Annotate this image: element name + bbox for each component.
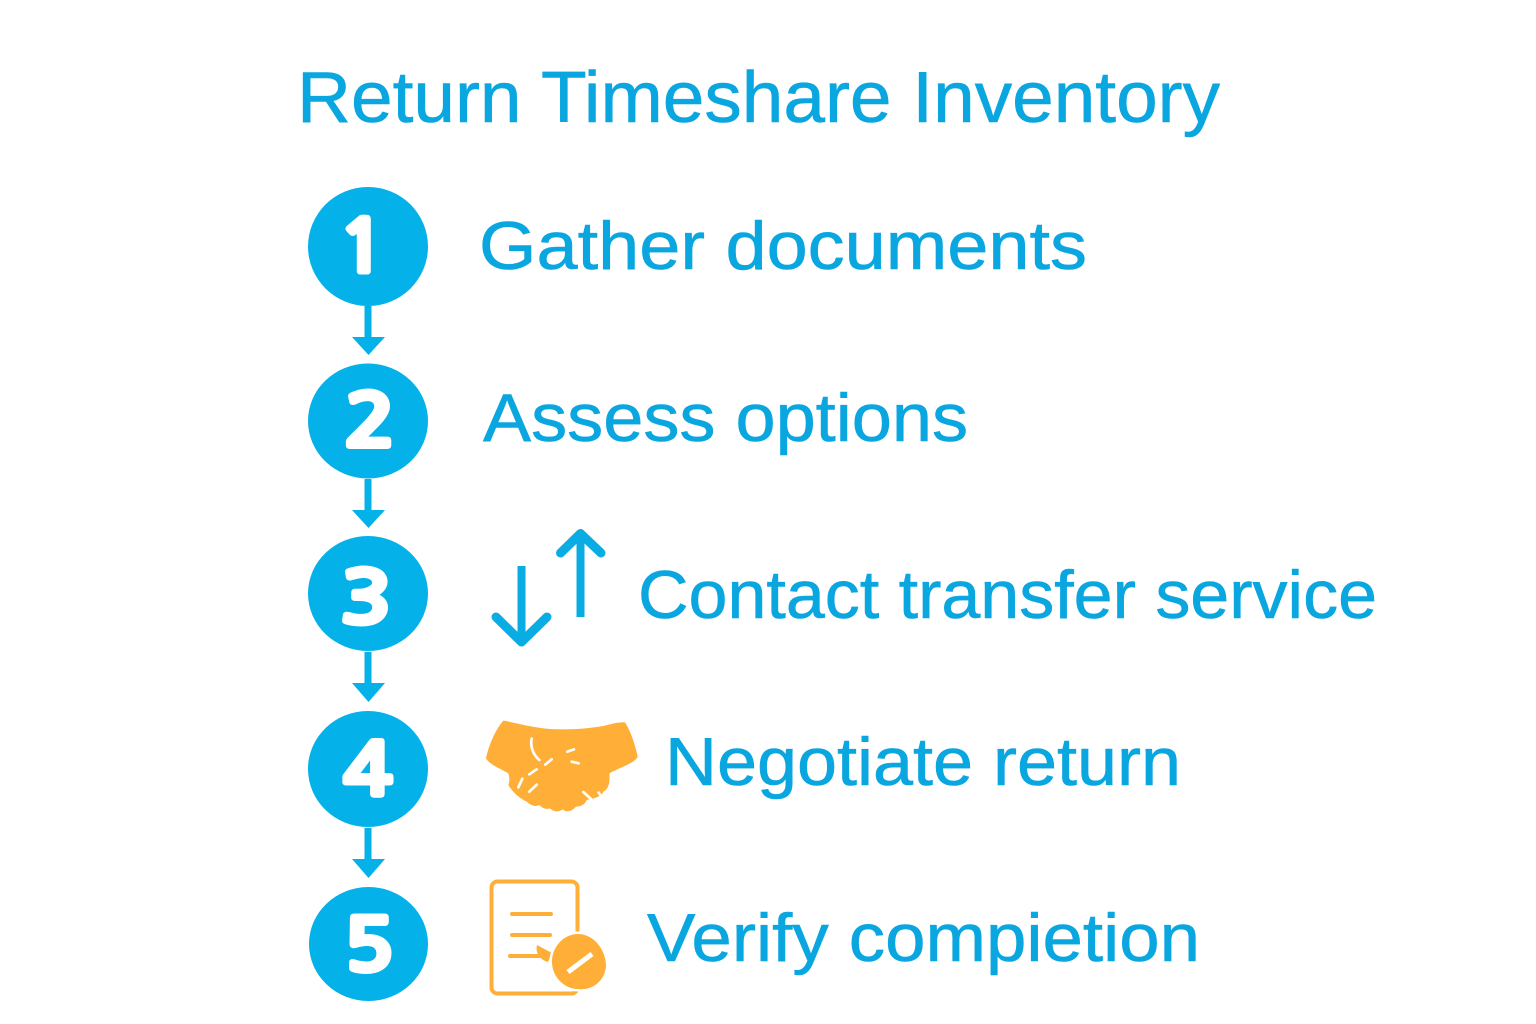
icon: transfer arrows [496,534,601,642]
step 4 label: Negotiate return [665,724,1181,800]
step 3 badge: 3 [340,562,392,634]
step 5 label: Verify compietion [647,900,1200,976]
step 2 badge: 2 [344,385,396,457]
step 3 label: Contact transfer service [638,557,1377,633]
arrow: step 2 to 3 [352,479,385,528]
title: Return Timeshare Inventory [297,58,1220,138]
arrow: step 3 to 4 [352,652,385,702]
step 5 badge: 5 [344,910,394,982]
icon: document with pen [492,882,607,994]
step 1 badge [308,187,428,306]
arrow: step 1 to 2 [352,306,385,355]
step 1 badge: 1 [338,211,386,283]
step 1 label: Gather documents [479,208,1087,284]
arrow: step 4 to 5 [352,828,385,878]
step 4 badge [308,711,428,827]
step 2 badge [308,364,428,478]
step 5 badge [309,887,428,1001]
icon: handshake [486,721,638,811]
step 2 label: Assess options [483,380,968,456]
step 4 badge: 4 [343,734,393,806]
step 3 badge [308,536,428,651]
